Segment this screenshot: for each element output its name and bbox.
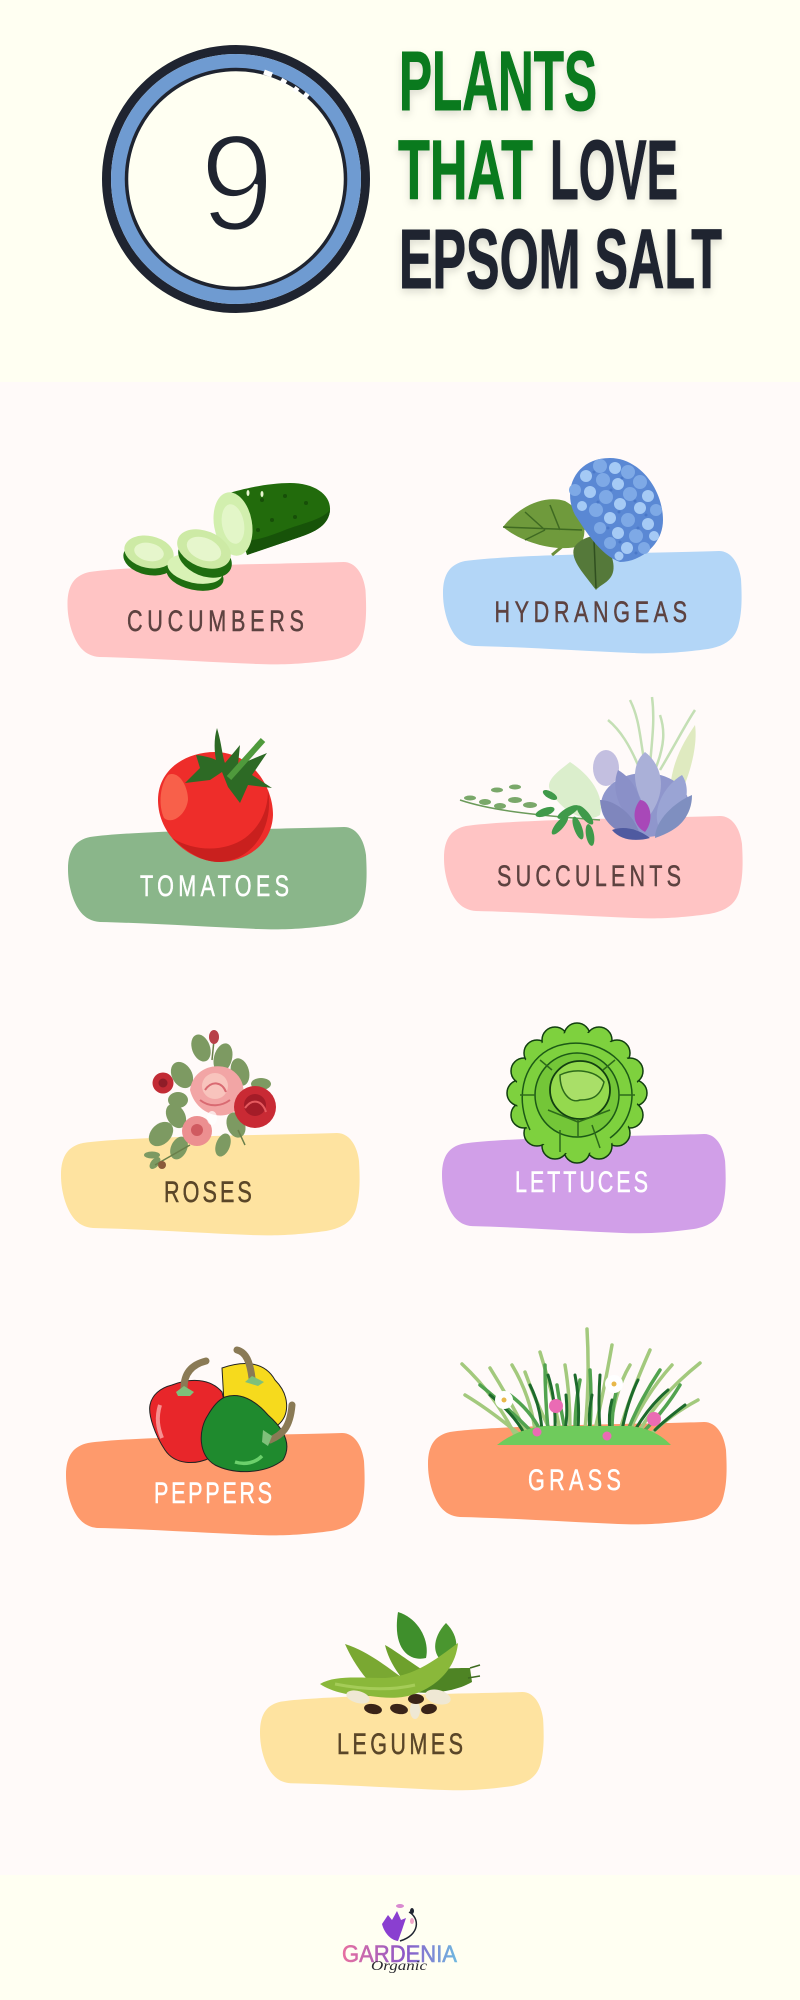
label: cucumbers: CUCUMBERS xyxy=(127,603,304,638)
icon: lettuce xyxy=(507,1023,647,1163)
title: LOVE xyxy=(550,123,678,217)
label: grass: GRASS xyxy=(528,1462,621,1497)
logo: Gardenia Organic: Organic xyxy=(371,1959,428,1974)
title: THAT xyxy=(398,123,533,217)
label: legumes: LEGUMES xyxy=(337,1726,463,1761)
label: lettuces: LETTUCES xyxy=(515,1164,648,1199)
panel: hydrangeas xyxy=(443,458,742,653)
icon: succulent arrangement xyxy=(460,697,696,847)
label: hydrangeas: HYDRANGEAS xyxy=(494,594,687,629)
panel: legumes xyxy=(260,1612,544,1790)
icon: tomato xyxy=(158,728,273,862)
footer panel xyxy=(0,1875,800,2000)
icon: hydrangea xyxy=(503,458,663,590)
logo: Gardenia Organic: GARDENIA xyxy=(342,1941,457,1968)
icon: numeral nine in blue ring xyxy=(106,50,366,308)
title: PLANTS xyxy=(399,34,597,128)
label: roses: ROSES xyxy=(164,1174,252,1209)
icon: numeral nine in blue ring: 9 xyxy=(200,107,274,260)
label: tomatoes: TOMATOES xyxy=(140,868,289,903)
icon: rose bouquet xyxy=(144,1030,276,1171)
panel: succulents xyxy=(444,697,743,918)
panel: lettuces xyxy=(442,1023,726,1233)
title xyxy=(398,34,722,306)
icon: legume pods and beans xyxy=(320,1612,480,1719)
label: succulents: SUCCULENTS xyxy=(497,858,681,893)
panel: roses xyxy=(61,1030,360,1235)
panel: grass xyxy=(428,1329,727,1524)
panel: cucumbers xyxy=(68,483,366,664)
label: peppers: PEPPERS xyxy=(154,1475,272,1510)
panel: tomatoes xyxy=(68,728,367,929)
icon: bell peppers xyxy=(150,1350,292,1472)
logo: Gardenia Organic xyxy=(342,1904,457,1974)
icon: cucumber xyxy=(120,483,330,596)
icon: grass tuft with flowers xyxy=(462,1329,700,1445)
header panel xyxy=(0,0,800,382)
panel: peppers xyxy=(66,1350,365,1535)
